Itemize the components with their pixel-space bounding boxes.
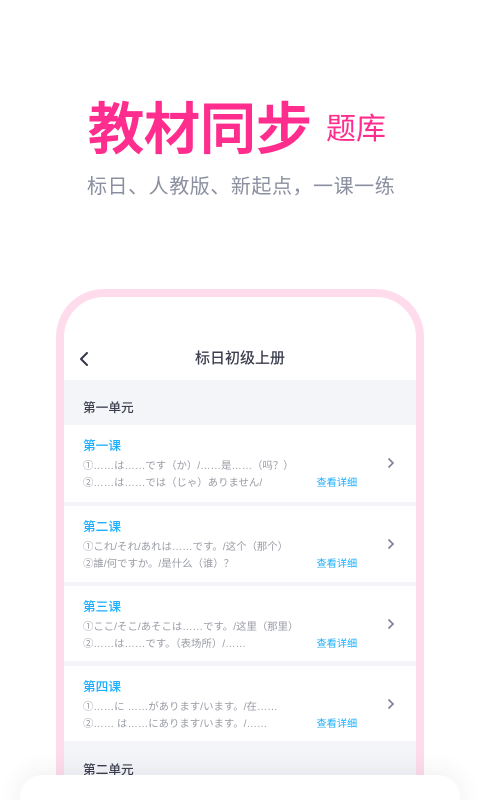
lesson card 4: 第四课: [83, 680, 121, 694]
screen title: 标日初级上册: [195, 350, 285, 367]
panel: phone mockup: [56, 289, 424, 800]
lesson card 2: 查看详细: [316, 559, 357, 570]
lesson card 3: 第三课: [83, 600, 121, 614]
lesson card 3: [64, 586, 416, 661]
subtitle tag: 题库: 题库: [326, 113, 386, 146]
lesson card 4: 查看详细: [316, 719, 357, 730]
lesson card 1: ①……は……です（か）/……是……（吗？）: [83, 460, 294, 472]
lesson card 4: ①……に ……があります/います。/在……: [83, 702, 278, 712]
lesson card 2: ①これ/それ/あれは……です。/这个（那个）: [83, 542, 288, 552]
bottom white sheet: [20, 775, 460, 800]
lesson card 3: ①ここ/そこ/あそこは……です。/这里（那里）: [83, 622, 298, 632]
tagline: 标日、人教版、新起点，一课一练: [87, 176, 395, 198]
list background: [64, 380, 416, 800]
lesson card 1: ②……は……では（じゃ）ありません/: [83, 478, 262, 489]
lesson card 4: [64, 666, 416, 741]
unit heading one: 第一单元: [83, 401, 134, 415]
lesson card 3: 查看详细: [316, 639, 357, 650]
back arrow icon: [80, 352, 88, 366]
lesson card 4: ②…… は……にあります/います。/……: [83, 719, 267, 730]
lesson card 2: [64, 506, 416, 582]
lesson card 1: 查看详细: [316, 478, 357, 489]
lesson card 1: 第一课: [83, 439, 121, 453]
lesson card 1: [64, 425, 416, 502]
unit heading two: 第二单元: [83, 763, 134, 777]
lesson card 2: ②誰/何ですか。/是什么（谁）？: [83, 559, 234, 570]
lesson card 2: 第二课: [83, 520, 121, 534]
title: 教材同步: 教材同步: [88, 98, 312, 161]
lesson card 3: ②……は……です。（表场所）/……: [83, 639, 246, 650]
